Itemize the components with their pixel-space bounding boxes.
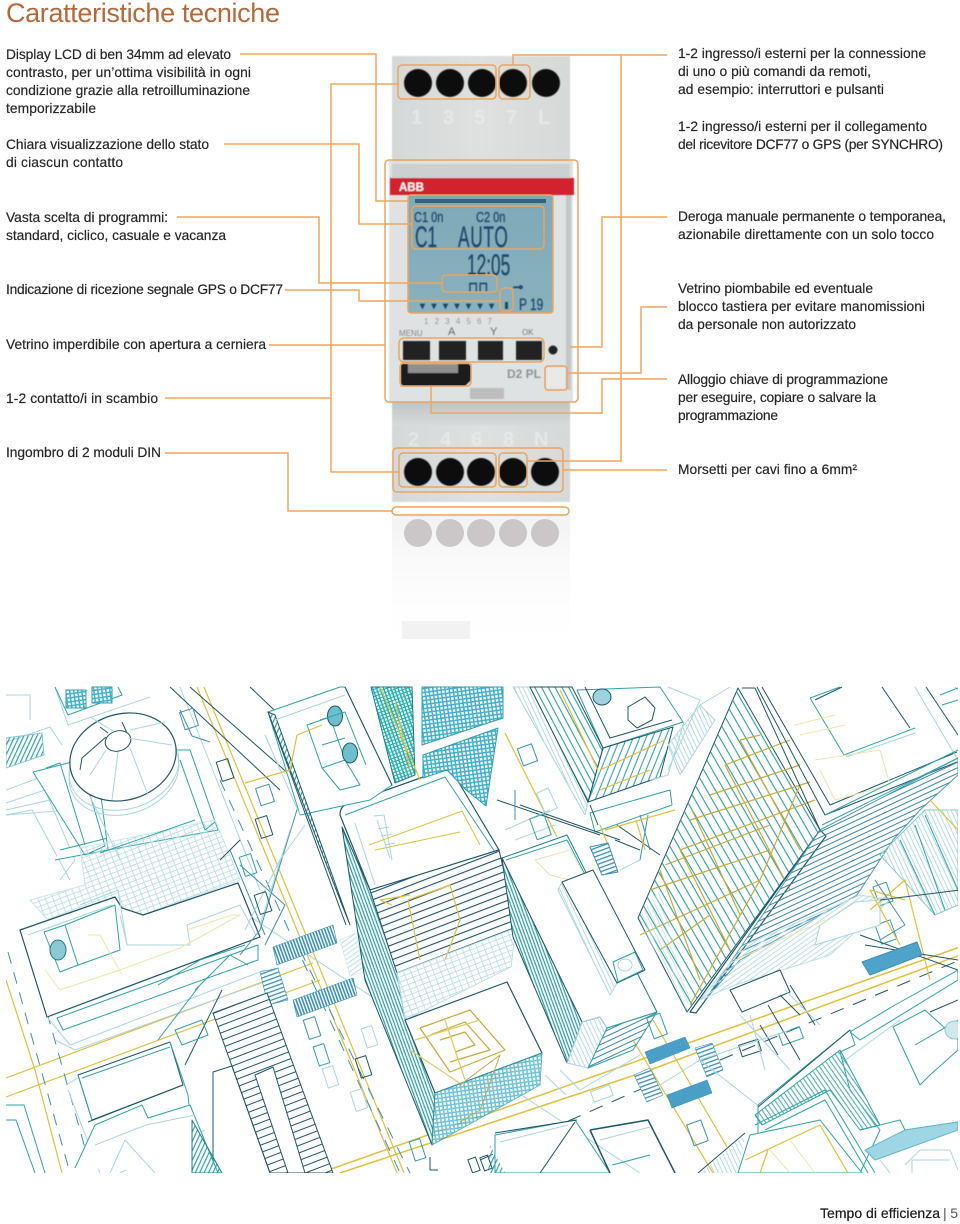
crosswalks right road [634, 1037, 723, 1108]
label: manual override: azionabile direttamente con un solo tocco [678, 227, 934, 242]
orange connector lines [165, 54, 667, 511]
right column feature labels [678, 46, 946, 477]
lower terminal numbers: 4 [440, 429, 452, 451]
LCD screen: ⊸ [513, 280, 523, 294]
label: display: condizione grazie alla retroilluminazione [6, 83, 250, 98]
day numbers and button captions: 1 2 3 4 5 6 7 [424, 317, 493, 326]
lower terminal numbers [408, 429, 548, 451]
device body [389, 56, 573, 502]
stepped right face [700, 750, 960, 1000]
day numbers and button captions [399, 317, 534, 338]
LCD screen: 12:05 [467, 249, 510, 282]
road vehicles and crossings left [158, 687, 426, 1161]
label: contact status: di ciascun contatto [6, 155, 123, 170]
label: manual override [678, 209, 946, 242]
large slanted tower face [638, 688, 826, 1013]
LCD screen: ⊓⊓ [468, 279, 488, 295]
lower terminal numbers: N [534, 429, 548, 451]
label: programming key: programmazione [678, 408, 778, 423]
stair building [213, 993, 333, 1173]
label: display [6, 47, 251, 116]
label: external inputs: di uno o più comandi da remoti, [678, 64, 871, 79]
label: programming key [678, 372, 888, 423]
day numbers and button captions: MENU [399, 329, 423, 338]
label: external inputs: 1-2 ingresso/i esterni per la connessione [678, 46, 926, 61]
model label and sealing window [507, 367, 565, 388]
left plinth building [20, 883, 270, 1050]
bottom road buildings [430, 1120, 675, 1173]
second building [502, 835, 657, 1095]
label: contact status: Chiara visualizzazione dello stato [6, 137, 209, 152]
lower right stepped building [755, 970, 960, 1173]
orange highlight boxes [385, 65, 578, 515]
upper right roof block [757, 687, 958, 815]
model label and sealing window: D2 PL [507, 367, 541, 381]
footer: Tempo di efficienza [820, 1205, 940, 1221]
upper terminal numbers: L [538, 107, 550, 129]
upper terminal holes [404, 69, 560, 97]
teal and blue grid towers [371, 687, 503, 806]
pale grid terrace [30, 760, 240, 920]
upper terminal numbers [411, 107, 550, 129]
day numbers and button captions: A [448, 326, 456, 338]
footer: | 5 [943, 1205, 958, 1221]
mid tower upper right of grid towers [513, 687, 730, 832]
upper-left pale blocks [6, 687, 150, 880]
lower terminal holes [404, 458, 559, 486]
device reflection [392, 515, 570, 655]
label: changeover: 1-2 contatto/i in scambio [6, 391, 158, 406]
day numbers and button captions: OK [522, 328, 534, 337]
label: display: Display LCD di ben 34mm ad elevato [6, 47, 231, 62]
upper terminal numbers: 3 [443, 107, 454, 129]
LCD screen: C2 0n [476, 208, 505, 225]
label: display: temporizzabile [6, 101, 96, 116]
label: programs: Vasta scelta di programmi: [6, 210, 168, 225]
label: sealable window [678, 281, 925, 332]
label: external inputs [678, 46, 926, 97]
pale ground and roads [6, 687, 960, 1173]
middle block road junction [497, 744, 897, 1146]
day numbers and button captions: Y [490, 326, 498, 338]
LCD screen: C1 [415, 221, 437, 254]
label: hinged window: Vetrino imperdibile con apertura a cerniera [6, 337, 266, 352]
label: terminals: Morsetti per cavi fino a 6mm² [678, 462, 857, 477]
buttons [403, 341, 558, 360]
label: sealable window: Vetrino piombabile ed eventuale [678, 281, 873, 296]
road-side box and poles [660, 970, 900, 1115]
LCD screen: C1 0n [414, 208, 443, 225]
label: programs: standard, ciclico, casuale e vacanza [6, 228, 226, 243]
lower-left building [6, 1042, 222, 1173]
label: signal: Indicazione di ricezione segnale GPS o DCF77 [6, 282, 283, 297]
building with roof vents [245, 687, 392, 925]
label: programming key: Alloggio chiave di programmazione [678, 372, 888, 387]
left column feature labels [6, 47, 283, 460]
central tower [340, 770, 542, 1145]
lower terminal numbers: 2 [408, 429, 419, 451]
upper terminal numbers: 5 [474, 107, 485, 129]
key slot [401, 364, 504, 399]
label: programming key: per eseguire, copiare o salvare la [678, 390, 876, 405]
lower terminal numbers: 6 [471, 429, 482, 451]
label: manual override: Deroga manuale permanente o temporanea, [678, 209, 946, 224]
label: receiver inputs [678, 119, 943, 152]
LCD screen [408, 195, 553, 315]
label: sealable window: blocco tastiera per evitare manomissioni [678, 299, 925, 314]
label: DIN modules: Ingombro di 2 moduli DIN [6, 445, 161, 460]
rotunda building [33, 700, 218, 860]
brand band: ABB [399, 182, 424, 194]
crosswalks left road [260, 925, 364, 1017]
brand band [390, 164, 574, 195]
label: programs [6, 210, 226, 243]
label: display: contrasto, per un’ottima visibilità in ogni [6, 65, 251, 80]
LCD screen: AUTO [458, 221, 509, 254]
lower terminal numbers: 8 [503, 429, 514, 451]
upper terminal numbers: 1 [411, 107, 422, 129]
upper terminal numbers: 7 [506, 107, 517, 129]
label: receiver inputs: 1-2 ingresso/i esterni per il collegamento [678, 119, 927, 134]
label: receiver inputs: del ricevitore DCF77 o GPS (per SYNCHRO) [678, 137, 943, 152]
bottom centre roof building [698, 1120, 862, 1173]
device photo [389, 56, 574, 655]
LCD screen: ▼▼▼▼▼▼▼ [418, 301, 496, 311]
LCD screen: P 19 [519, 296, 543, 315]
city line illustration [6, 687, 960, 1173]
label: contact status [6, 137, 209, 170]
label: external inputs: ad esempio: interruttori e pulsanti [678, 82, 884, 97]
label: sealable window: da personale non autorizzato [678, 317, 856, 332]
